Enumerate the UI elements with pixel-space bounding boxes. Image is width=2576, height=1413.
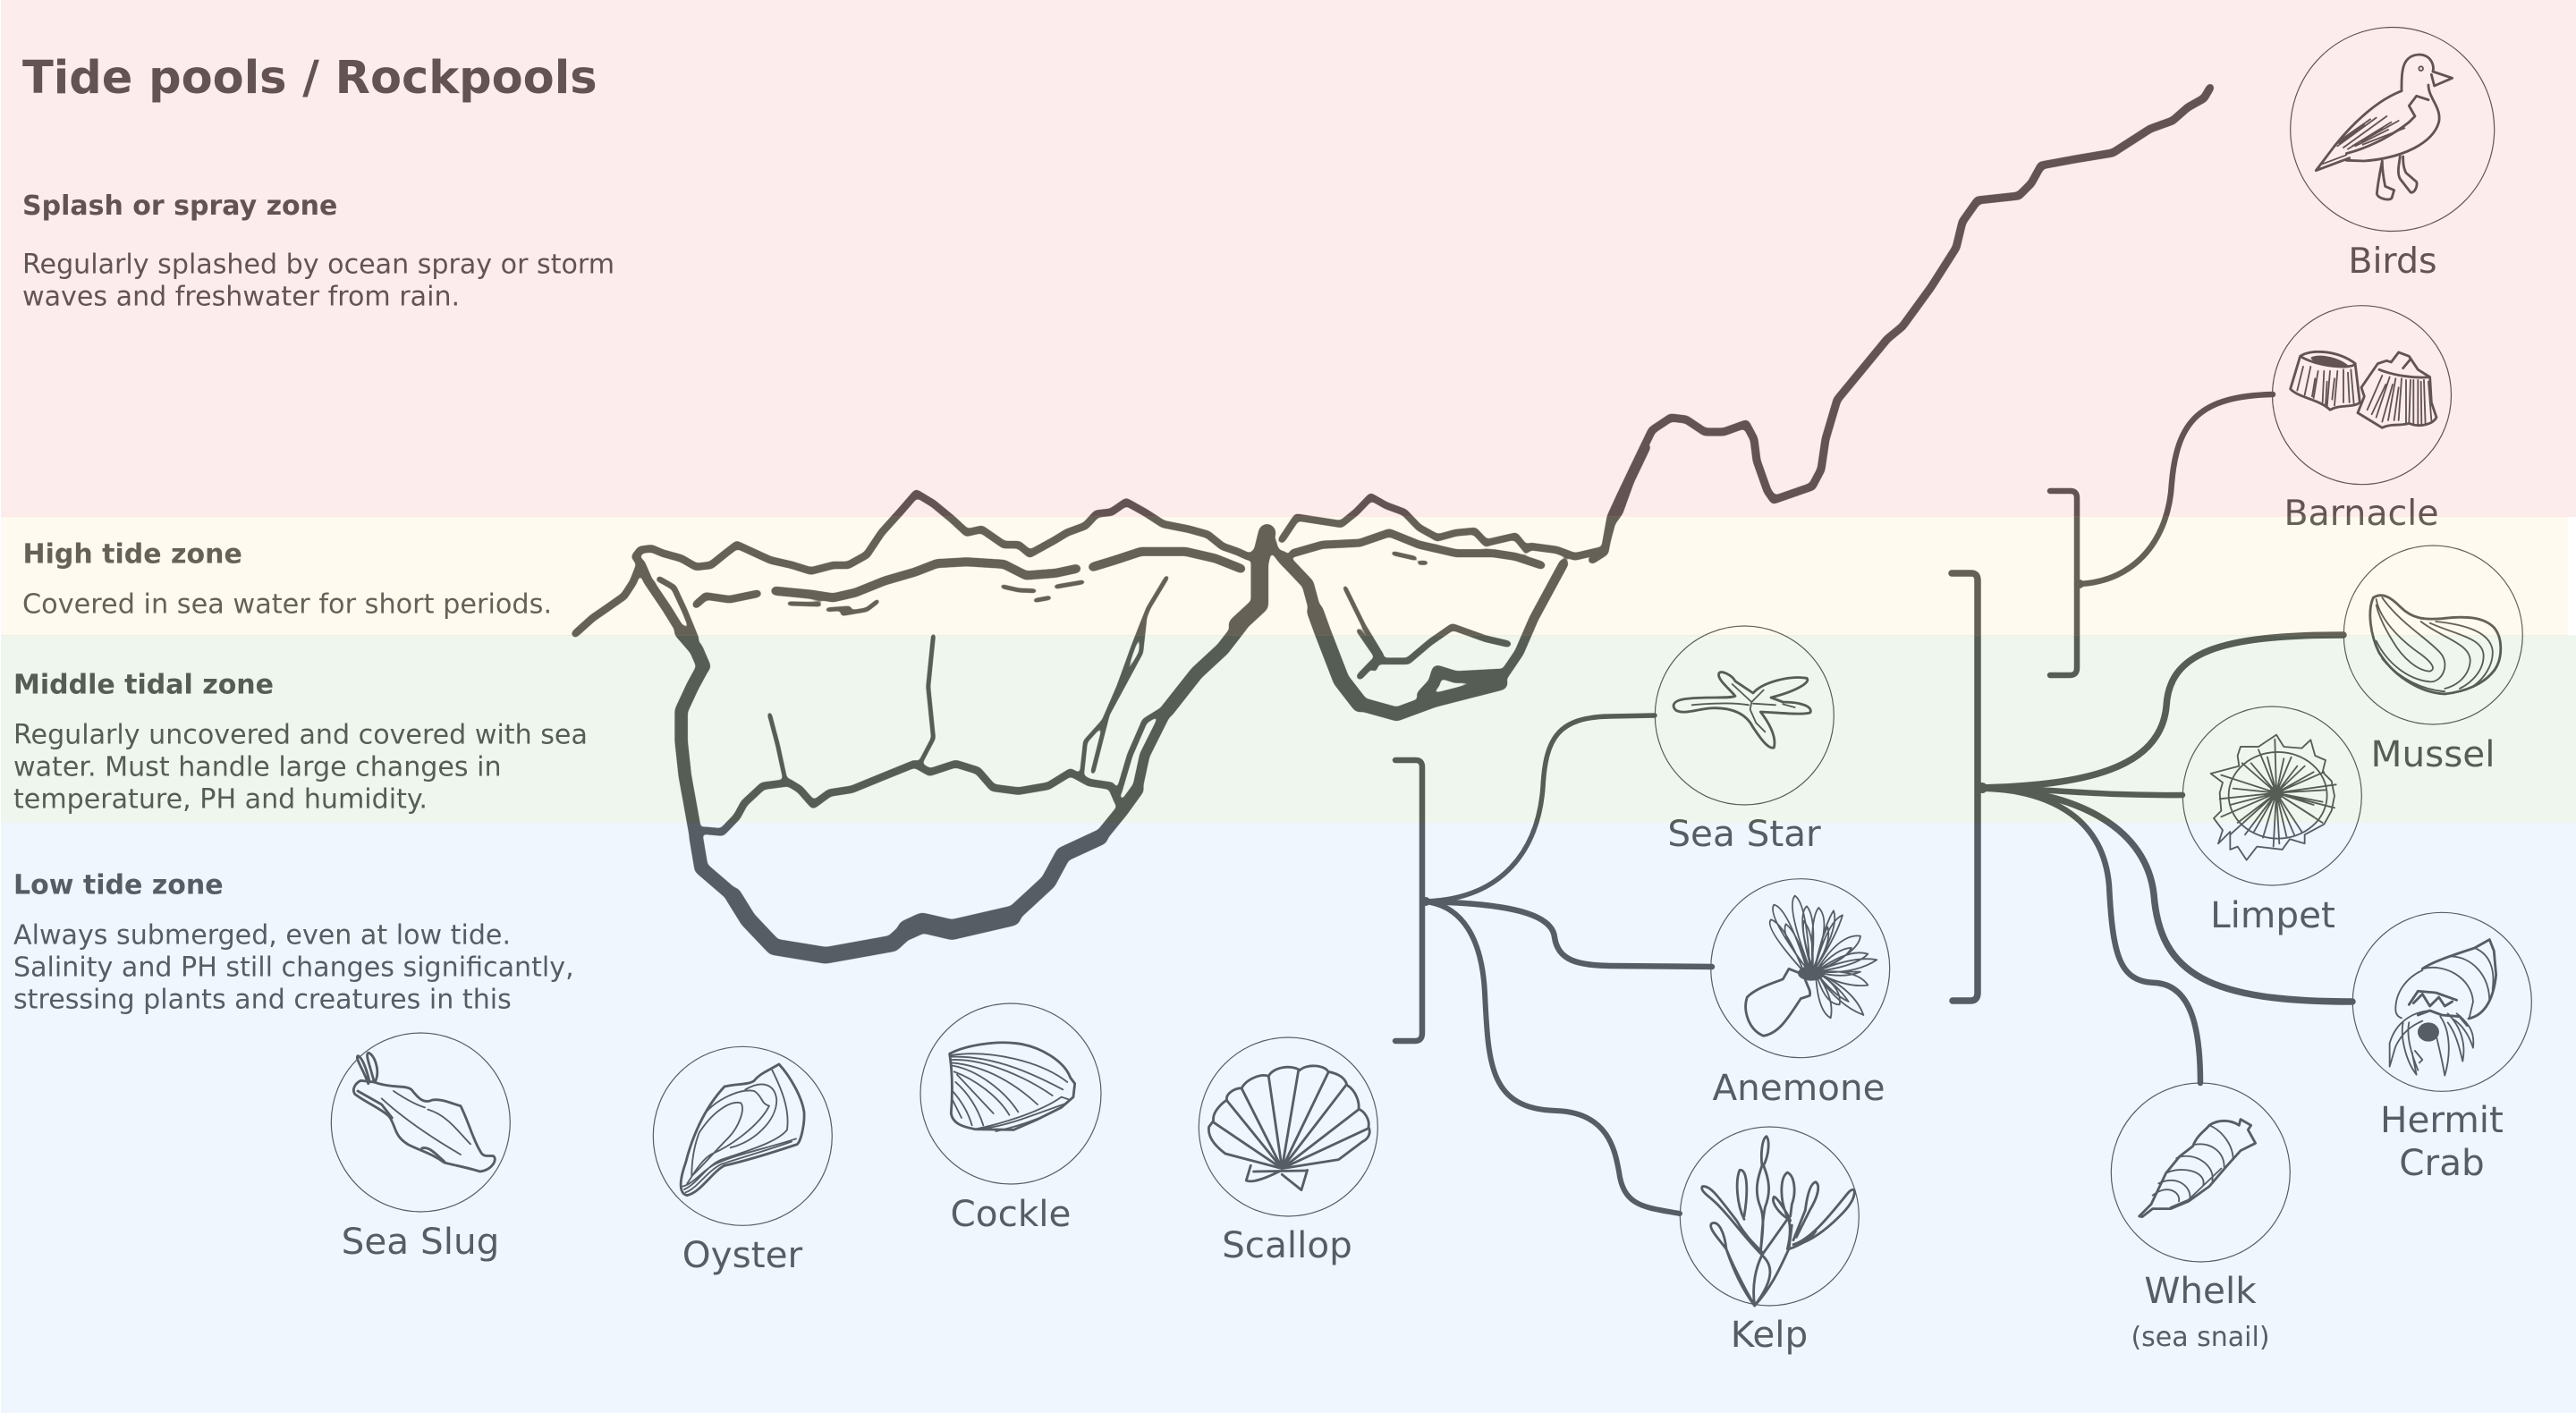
- species: oyster: Oyster: [682, 1233, 803, 1276]
- bracket: middle zone species: [1952, 573, 1987, 1001]
- text block: high tide zone: High tide zone: [23, 538, 242, 571]
- rock pool cross-section drawing: [575, 447, 1647, 955]
- species: cockle: [920, 1003, 1101, 1235]
- text block: splash or spray zone: waves and freshwater from rain.: [22, 281, 460, 313]
- species: whelk: (sea snail): [2131, 1322, 2270, 1353]
- text block: high tide zone: Covered in sea water for short periods.: [22, 588, 552, 621]
- species: mussel: Mussel: [2371, 732, 2495, 775]
- connector: to sea star: [1424, 715, 1655, 901]
- text block: splash or spray zone: [22, 190, 614, 313]
- rising shoreline line: [1592, 88, 2210, 560]
- band: high tide zone tint: [1, 516, 2568, 636]
- species: whelk: [2111, 1083, 2290, 1353]
- species: sea star: Sea Star: [1667, 812, 1821, 855]
- species: kelp: Kelp: [1731, 1313, 1808, 1356]
- bracket: high zone species: [2050, 491, 2084, 675]
- band: middle tidal zone tint: [1, 635, 2576, 823]
- species: limpet: Limpet: [2210, 893, 2335, 936]
- species: hermit crab: Crab: [2399, 1141, 2485, 1184]
- species: barnacle: [2272, 306, 2451, 534]
- band: splash zone tint: [1, 0, 2576, 517]
- connector: to whelk: [1980, 788, 2200, 1083]
- species: anemone: Anemone: [1712, 1066, 1885, 1109]
- text block: middle tidal zone: temperature, PH and humidity.: [13, 783, 428, 816]
- species: scallop: Scallop: [1222, 1223, 1352, 1266]
- text block: middle tidal zone: Middle tidal zone: [13, 669, 274, 701]
- text block: high tide zone: [22, 538, 552, 621]
- text block: low tide zone: stressing plants and creatures in this: [13, 984, 512, 1016]
- species: whelk: Whelk: [2144, 1269, 2257, 1312]
- text block: middle tidal zone: [13, 669, 588, 816]
- title: Tide pools / Rockpools: [22, 52, 597, 105]
- species: sea slug: [331, 1033, 510, 1263]
- species: hermit crab: [2352, 912, 2531, 1184]
- species: kelp: [1680, 1127, 1859, 1356]
- text block: low tide zone: Always submerged, even at low tide.: [13, 919, 511, 952]
- text block: middle tidal zone: water. Must handle large changes in: [13, 751, 502, 783]
- text block: middle tidal zone: Regularly uncovered and covered with sea: [13, 719, 588, 751]
- species: barnacle: Barnacle: [2284, 493, 2439, 534]
- text block: splash or spray zone: Regularly splashed by ocean spray or storm: [22, 249, 614, 281]
- connector: to mussel: [1980, 635, 2343, 788]
- species: scallop: [1199, 1037, 1377, 1266]
- band: low tide zone tint: [1, 823, 2576, 1413]
- species: anemone: [1711, 879, 1890, 1109]
- species: hermit crab: Hermit: [2380, 1098, 2504, 1141]
- text block: low tide zone: Low tide zone: [13, 869, 224, 901]
- connector: to kelp: [1424, 901, 1680, 1214]
- species: mussel: [2343, 546, 2522, 775]
- connector: to hermit crab: [1980, 788, 2352, 1002]
- connector: to limpet: [1980, 788, 2182, 795]
- species: cockle: Cockle: [951, 1192, 1071, 1235]
- text block: low tide zone: [13, 869, 574, 1016]
- species: limpet: [2182, 706, 2361, 936]
- text block: splash or spray zone: Splash or spray zone: [22, 190, 337, 222]
- species: birds: [2291, 27, 2495, 282]
- species: sea slug: Sea Slug: [342, 1220, 499, 1263]
- species: birds: Birds: [2348, 241, 2437, 282]
- connector: to anemone: [1424, 901, 1712, 967]
- bracket: low zone species: [1395, 760, 1430, 1041]
- species: oyster: [653, 1046, 832, 1276]
- text block: low tide zone: Salinity and PH still changes significantly,: [13, 952, 574, 984]
- connector: to barnacle: [2079, 394, 2273, 584]
- species: sea star: [1655, 626, 1834, 855]
